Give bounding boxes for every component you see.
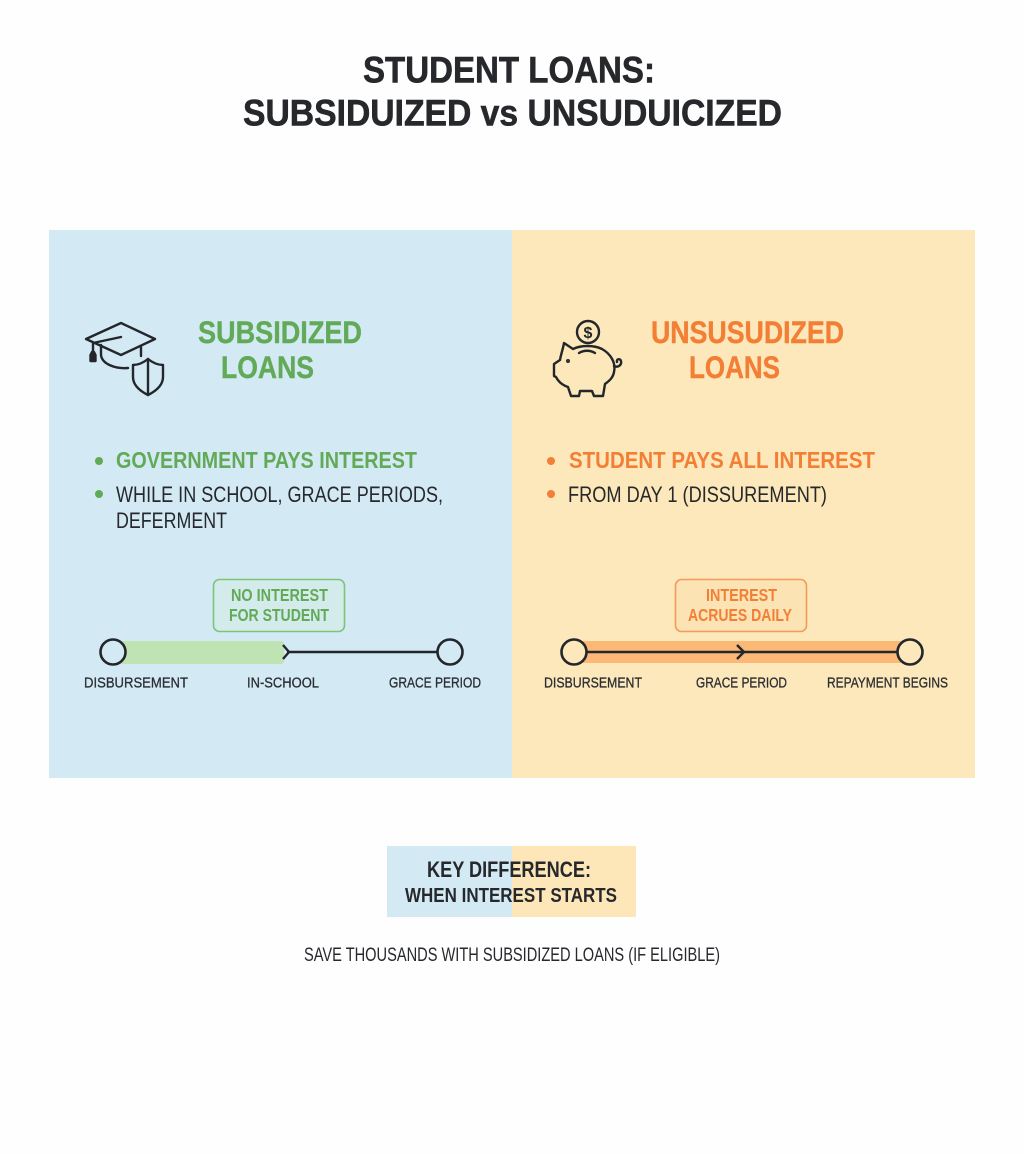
icon: graduation cap with shield xyxy=(86,323,163,395)
callout: interest accrues daily: INTEREST xyxy=(706,585,777,605)
timeline: unsubsidized: GRACE PERIOD xyxy=(696,674,787,692)
icon: piggy bank with coin: $ xyxy=(584,325,593,342)
bullet list: unsubsidized: FROM DAY 1 (DISSUREMENT) xyxy=(568,482,827,507)
timeline: unsubsidized xyxy=(544,640,948,692)
timeline: subsidized: DISBURSEMENT xyxy=(84,674,188,692)
bullet list: subsidized: GOVERNMENT PAYS INTEREST xyxy=(116,447,417,473)
bullet list: unsubsidized: STUDENT PAYS ALL INTEREST xyxy=(569,447,875,473)
callout: interest accrues daily xyxy=(676,580,806,632)
timeline: subsidized xyxy=(84,640,481,692)
heading: subsidized loans: SUBSIDIZED xyxy=(198,314,362,350)
icon: piggy bank with coin xyxy=(554,321,621,396)
timeline: unsubsidized: DISBURSEMENT xyxy=(544,674,642,692)
title: STUDENT LOANS: xyxy=(363,48,655,90)
heading: unsubsidized loans: UNSUSUDIZED xyxy=(651,314,844,350)
timeline: subsidized: GRACE PERIOD xyxy=(389,674,481,692)
bullet list: unsubsidized xyxy=(547,447,875,507)
key difference box xyxy=(387,846,636,917)
heading: unsubsidized loans xyxy=(651,314,844,385)
bullet list: subsidized xyxy=(95,447,443,533)
heading: subsidized loans: LOANS xyxy=(221,349,314,385)
timeline: unsubsidized: REPAYMENT BEGINS xyxy=(827,674,948,692)
callout: no interest for student: FOR STUDENT xyxy=(229,605,329,625)
callout: interest accrues daily: ACRUES DAILY xyxy=(688,605,792,625)
key difference box: KEY DIFFERENCE: xyxy=(427,857,591,882)
key difference box: WHEN INTEREST STARTS xyxy=(405,885,617,907)
heading: subsidized loans xyxy=(198,314,362,385)
panel: unsubsidized loans xyxy=(512,230,975,778)
bullet list: subsidized: WHILE IN SCHOOL, GRACE PERIODS, xyxy=(116,482,443,507)
timeline: subsidized: IN-SCHOOL xyxy=(247,674,319,692)
footer note: SAVE THOUSANDS WITH SUBSIDIZED LOANS (IF ELIGIBLE) xyxy=(304,944,720,966)
title: SUBSIDUIZED vs UNSUDUICIZED xyxy=(243,92,782,134)
callout: no interest for student xyxy=(214,580,344,632)
bullet list: subsidized: DEFERMENT xyxy=(116,508,227,533)
heading: unsubsidized loans: LOANS xyxy=(689,349,780,385)
panel: subsidized loans xyxy=(49,230,512,778)
title xyxy=(243,48,782,134)
callout: no interest for student: NO INTEREST xyxy=(231,585,328,605)
